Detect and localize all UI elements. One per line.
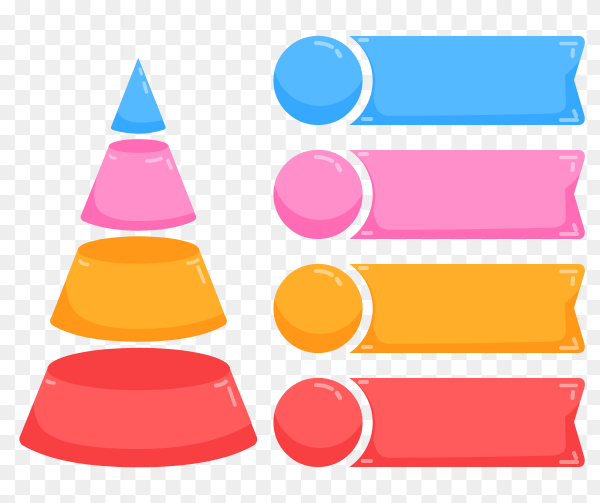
banner: red	[349, 378, 585, 467]
icon: blue sphere	[273, 36, 363, 126]
tier 4: red frustum	[19, 348, 257, 467]
banner: orange	[349, 264, 585, 353]
row 3: orange circle and banner	[273, 264, 585, 354]
icon: red sphere	[273, 378, 363, 468]
banner: pink	[349, 150, 585, 239]
icon: pink sphere	[273, 150, 363, 240]
row 4: red circle and banner	[273, 378, 585, 468]
tier 3: orange frustum	[50, 236, 227, 342]
tier 2: pink frustum	[81, 139, 196, 231]
pyramid: four stacked tiers	[19, 58, 257, 467]
tier 1: blue cone	[111, 58, 166, 134]
banner: blue	[349, 36, 585, 125]
row 2: pink circle and banner	[273, 150, 585, 240]
row 1: blue circle and banner	[273, 36, 585, 126]
icon: orange sphere	[273, 264, 363, 354]
